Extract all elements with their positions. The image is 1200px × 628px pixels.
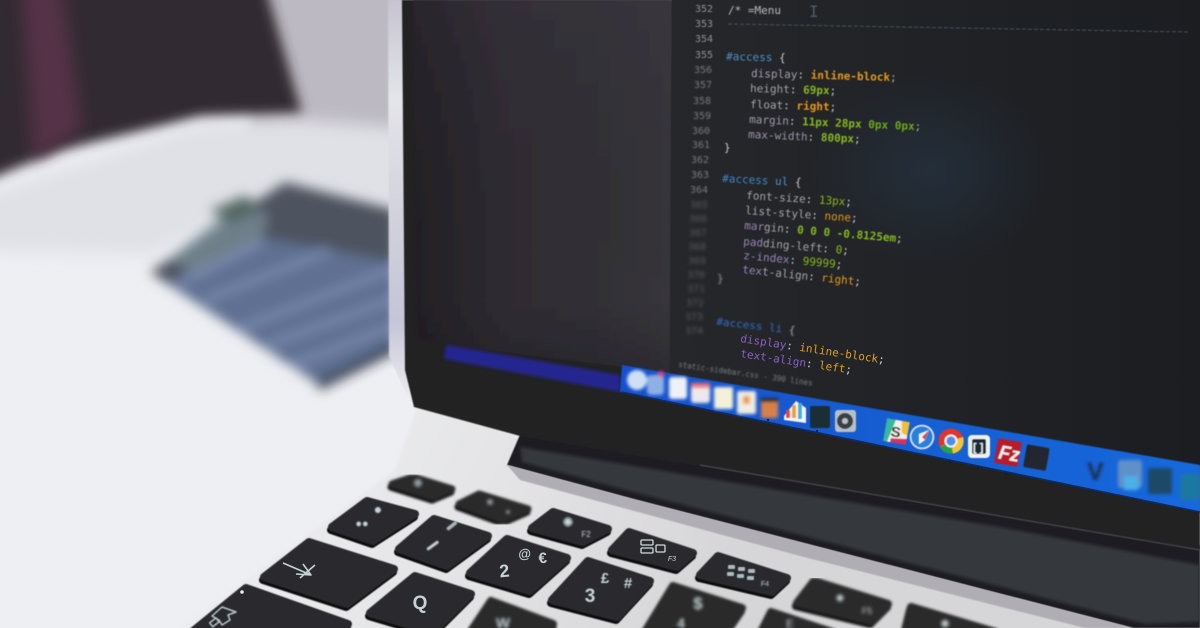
panel: gray hinge band xyxy=(520,447,1200,624)
code block: #access rule: margin: 11px 28px 0px 0px; xyxy=(749,113,921,133)
background: blurred room behind laptop xyxy=(0,0,420,192)
key labels: back row blurred xyxy=(414,479,510,514)
line numbers: 367 xyxy=(689,228,707,239)
key labels: € xyxy=(538,550,548,567)
dock icon: brackets xyxy=(968,435,990,458)
key labels: 2 xyxy=(498,561,510,582)
key labels: $ xyxy=(693,594,703,613)
code block: #access li rule: #access li { xyxy=(716,315,796,337)
line numbers: 358 xyxy=(693,96,711,107)
code block: #access li rule xyxy=(716,315,886,377)
line numbers: 363 xyxy=(691,170,709,181)
line numbers: 356 xyxy=(694,65,712,76)
line numbers: 352 xyxy=(695,4,713,15)
key labels: F4 xyxy=(761,581,769,588)
panel: hinge and lower lid xyxy=(507,430,1200,628)
dock icon: slack xyxy=(883,418,910,445)
code block: #access ul rule: z-index: 99999; xyxy=(743,249,843,271)
key labels: F2 xyxy=(581,530,591,539)
dock icon: slack: S xyxy=(889,423,902,442)
code block: #access rule: } xyxy=(724,141,731,154)
line numbers: 366 xyxy=(689,214,707,225)
dock icons: blurred group right xyxy=(1087,458,1200,500)
lid bottom edge highlight xyxy=(700,465,1200,550)
decorative glow on screen xyxy=(810,75,1050,265)
keys: sharp rows xyxy=(192,501,787,628)
key labels: ● xyxy=(374,501,382,517)
line numbers: 365 xyxy=(690,200,708,211)
panel: left editor pane xyxy=(413,0,672,376)
code block: menu comment: I xyxy=(809,2,819,21)
key labels xyxy=(210,501,950,628)
code block: #access rule: float: right; xyxy=(750,98,836,114)
key labels: £ xyxy=(601,570,610,587)
line numbers: 357 xyxy=(694,80,712,91)
panel: laptop deck xyxy=(150,400,1200,628)
code block: #access ul rule: padding-left: 0; xyxy=(743,235,849,257)
line numbers: 360 xyxy=(692,126,710,137)
dock icons: blurred group left xyxy=(627,370,778,418)
icon: tab arrow xyxy=(283,563,315,578)
code block: #access rule: #access { xyxy=(726,50,786,65)
key labels: 3 xyxy=(585,586,595,607)
dock bar xyxy=(620,365,1200,512)
line numbers: 374 xyxy=(685,326,703,337)
line numbers: 364 xyxy=(690,185,708,196)
blue status line in left pane xyxy=(444,345,620,392)
code block: #access li rule: display: inline-block; xyxy=(740,332,886,367)
keyboard xyxy=(192,477,995,628)
line numbers: 370 xyxy=(687,270,705,281)
key labels: Q xyxy=(413,593,427,614)
key labels: F3 xyxy=(668,556,676,563)
icon: shift arrow xyxy=(210,607,236,627)
panel: silver strip behind keyboard xyxy=(507,465,1133,628)
code block: menu comment: /* =Menu xyxy=(728,4,781,17)
panel: glass screen edge xyxy=(388,0,409,400)
line numbers: 355 xyxy=(695,50,713,61)
code block: menu comment xyxy=(728,2,1190,32)
key labels: ●● xyxy=(355,518,369,530)
dock icon: brackets: [ ] xyxy=(973,442,984,454)
line numbers: 371 xyxy=(687,284,705,295)
key labels: ✺ xyxy=(562,514,574,530)
line numbers: 359 xyxy=(693,111,711,122)
icon: F4 launchpad xyxy=(727,565,755,580)
icon: F3 mission control xyxy=(641,540,665,553)
line numbers: 362 xyxy=(691,155,709,166)
keys: front blurred xyxy=(465,581,995,628)
code block: #access rule: height: 69px; xyxy=(750,82,836,97)
code block: #access rule: max-width: 800px; xyxy=(748,128,861,146)
status bar text: static-sidebar.css - 390 lines xyxy=(678,360,813,388)
line numbers: 372 xyxy=(686,298,704,309)
key labels: @ xyxy=(518,546,532,561)
line numbers xyxy=(685,4,713,337)
code block: #access ul rule: } xyxy=(717,272,724,285)
panel: blurred tablet on desk xyxy=(150,182,396,386)
panel: white laptop lid band behind xyxy=(0,120,420,255)
code block: #access ul rule: margin: 0 0 0 -0.8125em; xyxy=(744,219,903,245)
dock icon: filezilla: Fz xyxy=(997,443,1022,467)
key labels: F5 xyxy=(862,606,872,616)
key labels: ✺ xyxy=(835,593,845,605)
dock icon: terminal xyxy=(1023,444,1050,471)
panel: screen bezel xyxy=(402,0,1200,550)
key row: function keys back xyxy=(392,477,528,520)
dock indicator dots xyxy=(767,419,1007,475)
code block: #access li rule: text-align: left; xyxy=(740,347,853,377)
line numbers: 369 xyxy=(688,256,706,267)
code block: #access rule xyxy=(724,50,921,154)
line numbers: 361 xyxy=(692,140,710,151)
code block: #access ul rule: font-size: 13px; xyxy=(746,189,852,209)
code block: #access rule: display: inline-block; xyxy=(751,67,897,84)
code block: #access ul rule xyxy=(717,172,903,288)
line numbers: 353 xyxy=(695,19,713,30)
code block: #access ul rule: list-style: none; xyxy=(745,204,858,225)
line numbers: 373 xyxy=(685,312,703,323)
dock icon: chrome xyxy=(938,428,964,454)
code block: #access ul rule: #access ul { xyxy=(722,172,802,189)
line numbers: 354 xyxy=(695,34,713,45)
panel: code editor pane xyxy=(670,0,1200,466)
dock icons: blurred group right: V xyxy=(1087,458,1104,486)
key labels: # xyxy=(624,575,633,592)
dock icon: safari xyxy=(910,426,934,448)
line numbers: 368 xyxy=(688,242,706,253)
code block: #access ul rule: text-align: right; xyxy=(742,263,862,288)
